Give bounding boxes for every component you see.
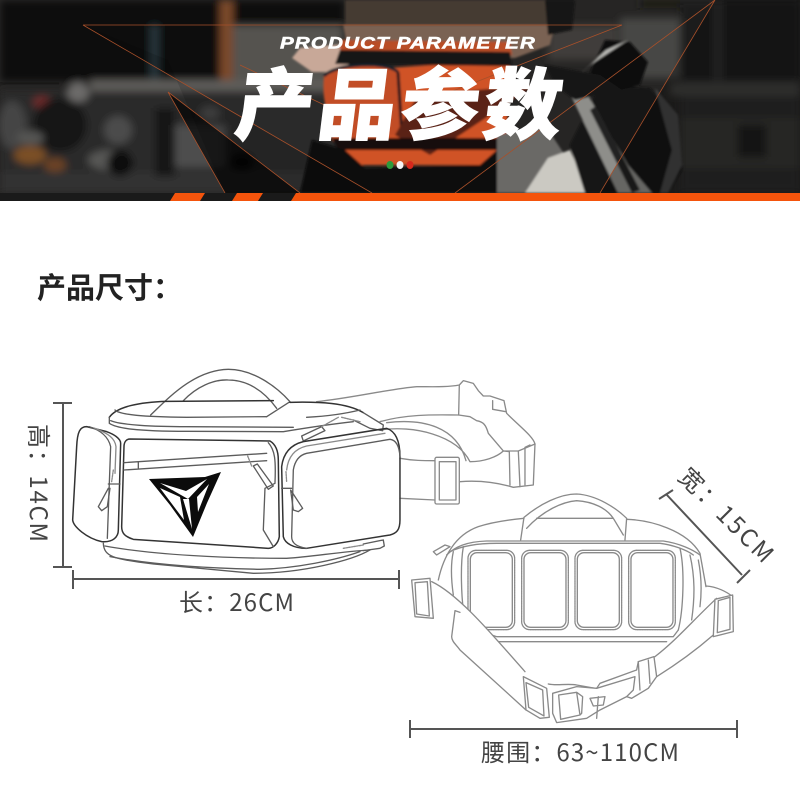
waist dimension line	[410, 720, 737, 738]
back view of bag	[412, 494, 733, 723]
bottom base	[103, 540, 384, 573]
height label: 高：14CM	[23, 424, 58, 542]
padded panels	[468, 550, 675, 630]
blurred street background	[0, 0, 800, 193]
front view of bag	[73, 369, 400, 573]
front bag strap	[317, 381, 535, 504]
rider, bag and bike	[292, 0, 682, 193]
back handle	[521, 494, 627, 540]
length dimension line	[73, 570, 399, 589]
back body	[433, 518, 706, 642]
waist strap	[412, 578, 733, 718]
tricolor dots	[386, 161, 414, 169]
left pocket	[73, 427, 121, 542]
triangle overlays	[83, 0, 800, 193]
length label: 长：26CM	[179, 583, 294, 618]
side-release buckle	[553, 657, 657, 723]
top lid	[109, 401, 383, 441]
center pocket	[122, 439, 279, 548]
logo	[149, 472, 221, 537]
width dimension line	[659, 490, 750, 583]
main title: 产品参数	[230, 42, 570, 156]
header banner	[0, 0, 800, 201]
handle	[151, 369, 290, 417]
section heading: 产品尺寸：	[37, 265, 182, 307]
stripe bar	[0, 193, 800, 201]
waist label: 腰围：63~110CM	[481, 733, 679, 768]
english subtitle: PRODUCT PARAMETER	[280, 34, 536, 52]
right pocket	[282, 428, 400, 548]
height dimension line	[53, 403, 72, 567]
width label: 宽：15CM	[672, 458, 783, 569]
banner photo: rider with bag and motorcycle	[0, 0, 800, 193]
